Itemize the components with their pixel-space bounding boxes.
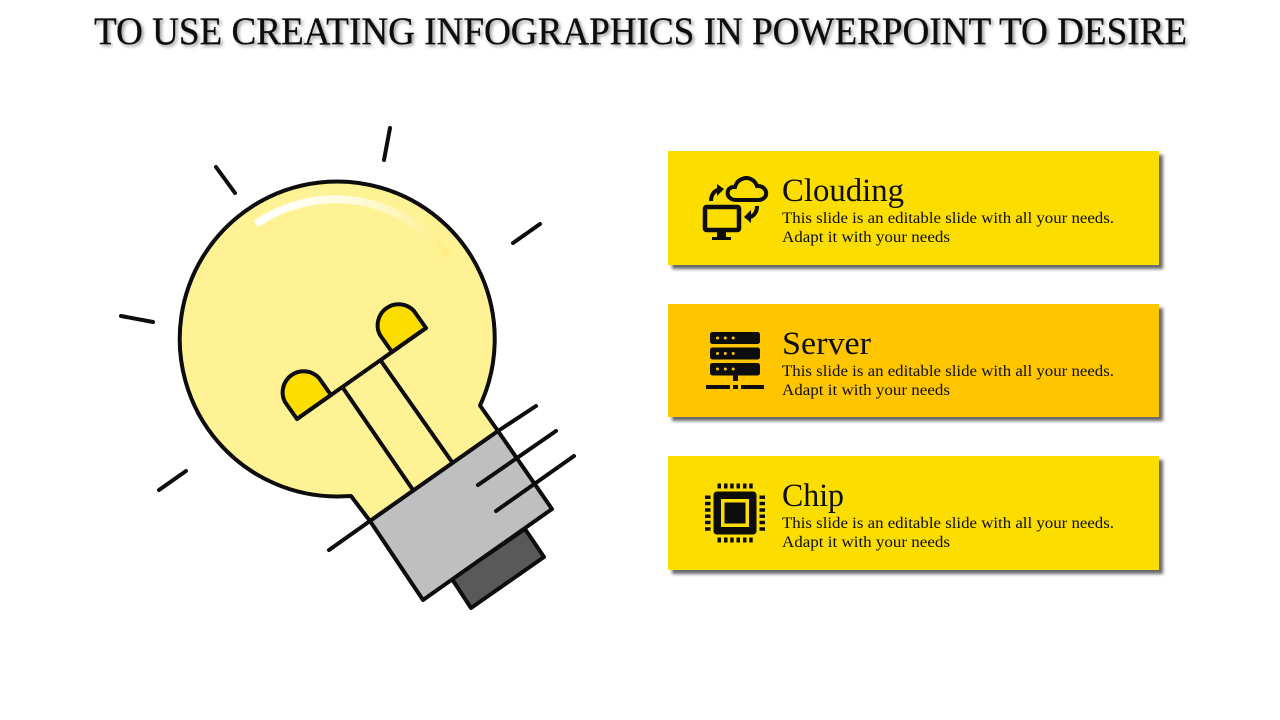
icon: microchip	[705, 484, 765, 542]
filament left tip	[283, 371, 331, 419]
light rays	[121, 128, 540, 490]
heading: Clouding	[782, 173, 904, 209]
description	[782, 210, 1114, 246]
heading: Server	[782, 326, 871, 362]
description: This slide is an editable slide with all your needs.	[782, 363, 1114, 380]
panel background	[668, 456, 1159, 570]
bulb dark cap	[452, 529, 544, 608]
bulb base	[370, 431, 552, 600]
icon: server rack	[706, 332, 764, 389]
icon: cloud and computer	[705, 178, 766, 240]
heading: Chip	[782, 478, 844, 514]
panel: clouding	[668, 151, 1159, 265]
filament stems	[343, 361, 452, 490]
highlight	[256, 199, 448, 256]
panel: chip	[668, 456, 1159, 570]
description	[782, 515, 1114, 551]
panel background	[668, 304, 1159, 417]
description	[782, 363, 1114, 399]
panel: server	[668, 304, 1159, 417]
description: Adapt it with your needs	[782, 382, 950, 399]
light bulb illustration	[121, 128, 574, 608]
description: This slide is an editable slide with all your needs.	[782, 515, 1114, 532]
description: This slide is an editable slide with all your needs.	[782, 210, 1114, 227]
base thread lines	[329, 406, 574, 550]
title: TO USE CREATING INFOGRAPHICS IN POWERPOINT TO DESIRE	[94, 10, 1187, 53]
description: Adapt it with your needs	[782, 534, 950, 551]
filament right tip	[378, 304, 426, 352]
panel background	[668, 151, 1159, 265]
description: Adapt it with your needs	[782, 229, 950, 246]
bulb glass	[180, 182, 498, 521]
filament bar	[297, 328, 426, 419]
